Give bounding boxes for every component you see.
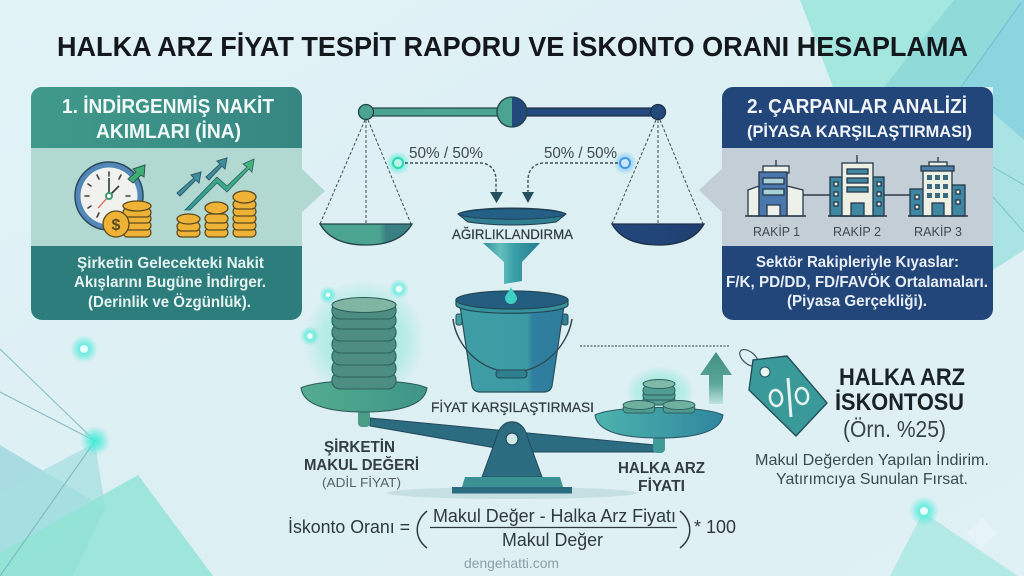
- panel description: (Derinlik ve Özgünlük).: [88, 294, 251, 311]
- left pan: [320, 224, 412, 245]
- formula: Makul Değer: [502, 529, 603, 550]
- formula: * 100: [694, 516, 736, 537]
- discount heading: (Örn. %25): [843, 416, 946, 442]
- panel heading: 1. İNDİRGENMİŞ NAKİT: [62, 95, 274, 118]
- panel description: Şirketin Gelecekteki Nakit: [77, 255, 264, 272]
- panel description: (Piyasa Gerçekliği).: [787, 293, 927, 310]
- flow arrow right: [522, 151, 637, 203]
- icon band: [31, 148, 302, 246]
- panel arrow: [699, 167, 724, 214]
- weight label left: 50% / 50%: [409, 145, 483, 162]
- formula: İskonto Oranı =: [288, 516, 410, 537]
- scale pivot: [497, 97, 512, 127]
- connector lines: [803, 194, 910, 196]
- arrow: price up: [700, 352, 732, 404]
- label: rakip 1: RAKİP 1: [753, 224, 800, 239]
- comparison band: [722, 148, 993, 246]
- icon: building 1: [745, 160, 806, 216]
- bottom balance scale: [301, 280, 723, 499]
- website credit: dengehatti.com: [464, 555, 559, 571]
- label: makul değer: ŞİRKETİN: [324, 438, 395, 456]
- label: halka arz fiyatı: [618, 460, 705, 495]
- left bowl: [301, 380, 427, 412]
- bucket: [453, 287, 572, 392]
- title: HALKA ARZ FİYAT TESPİT RAPORU VE İSKONTO ORANI HESAPLAMA: [57, 31, 968, 62]
- funnel label: AĞIRLIKLANDIRMA: [452, 227, 573, 242]
- discount heading: [835, 364, 965, 442]
- large coin stack: [332, 298, 396, 389]
- dotted level line: [580, 345, 730, 347]
- funnel: [458, 208, 566, 284]
- scale shadow: [387, 487, 637, 499]
- label: makul değer: (ADİL FİYAT): [322, 475, 401, 490]
- glow dots: [70, 279, 939, 526]
- scale beam: [370, 418, 655, 452]
- icon: clock with coins: $: [112, 217, 121, 234]
- discount description: [755, 450, 989, 488]
- right pan: [612, 224, 704, 245]
- icon: building 3: [908, 157, 968, 216]
- panel description: [726, 254, 988, 310]
- scale beam: [370, 108, 512, 116]
- icon: discount tag: [737, 346, 827, 436]
- left post: [358, 410, 370, 427]
- panel description: Sektör Rakipleriyle Kıyaslar:: [756, 254, 959, 271]
- panel heading: AKIMLARI (İNA): [96, 120, 241, 143]
- formula: [288, 505, 736, 550]
- panel card: [31, 87, 302, 320]
- fulcrum: [482, 422, 542, 477]
- label: rakip 2: RAKİP 2: [833, 224, 881, 239]
- right post: [653, 436, 665, 453]
- label: rakip 3: RAKİP 3: [914, 224, 962, 239]
- scale strings: [320, 120, 703, 224]
- formula: Makul Değer - Halka Arz Fiyatı: [433, 505, 676, 526]
- top balance scale: [320, 97, 704, 245]
- panel: çarpanlar: [699, 87, 993, 320]
- panel description: Akışlarını Bugüne İndirger.: [74, 274, 266, 291]
- label: halka arz fiyatı: HALKA ARZ: [618, 460, 705, 477]
- panel header: [31, 87, 302, 148]
- aura behind coins: [304, 280, 424, 400]
- weight label right: 50% / 50%: [544, 145, 617, 162]
- label: makul değer: [304, 438, 419, 490]
- panel: İNA: [31, 87, 325, 320]
- small coin stack: [623, 380, 695, 413]
- panel heading: (PİYASA KARŞILAŞTIRMASI): [747, 122, 972, 141]
- flow arrow left: [386, 151, 503, 203]
- icon: building 2: [828, 155, 887, 216]
- icon: growing coin stacks: [177, 158, 256, 237]
- panel description: [74, 255, 266, 311]
- discount description: Yatırımcıya Sunulan Fırsat.: [776, 471, 968, 488]
- panel heading: 2. ÇARPANLAR ANALİZİ: [747, 95, 967, 118]
- label: fiyat karşılaştırması: FİYAT KARŞILAŞTIRMASI: [431, 400, 594, 415]
- panel arrow: [300, 167, 325, 214]
- panel description: F/K, PD/DD, FD/FAVÖK Ortalamaları.: [726, 274, 988, 291]
- label: halka arz fiyatı: FİYATI: [638, 477, 685, 495]
- drop: [505, 287, 517, 304]
- panel heading: [62, 95, 274, 143]
- label: makul değer: MAKUL DEĞERİ: [304, 455, 419, 474]
- panel heading: [747, 95, 972, 141]
- discount heading: İSKONTOSU: [835, 389, 964, 416]
- right bowl: [595, 408, 723, 438]
- panel card: [722, 87, 993, 320]
- discount description: Makul Değerden Yapılan İndirim.: [755, 450, 989, 469]
- icon: clock with coins: [75, 162, 151, 237]
- discount heading: HALKA ARZ: [839, 364, 965, 391]
